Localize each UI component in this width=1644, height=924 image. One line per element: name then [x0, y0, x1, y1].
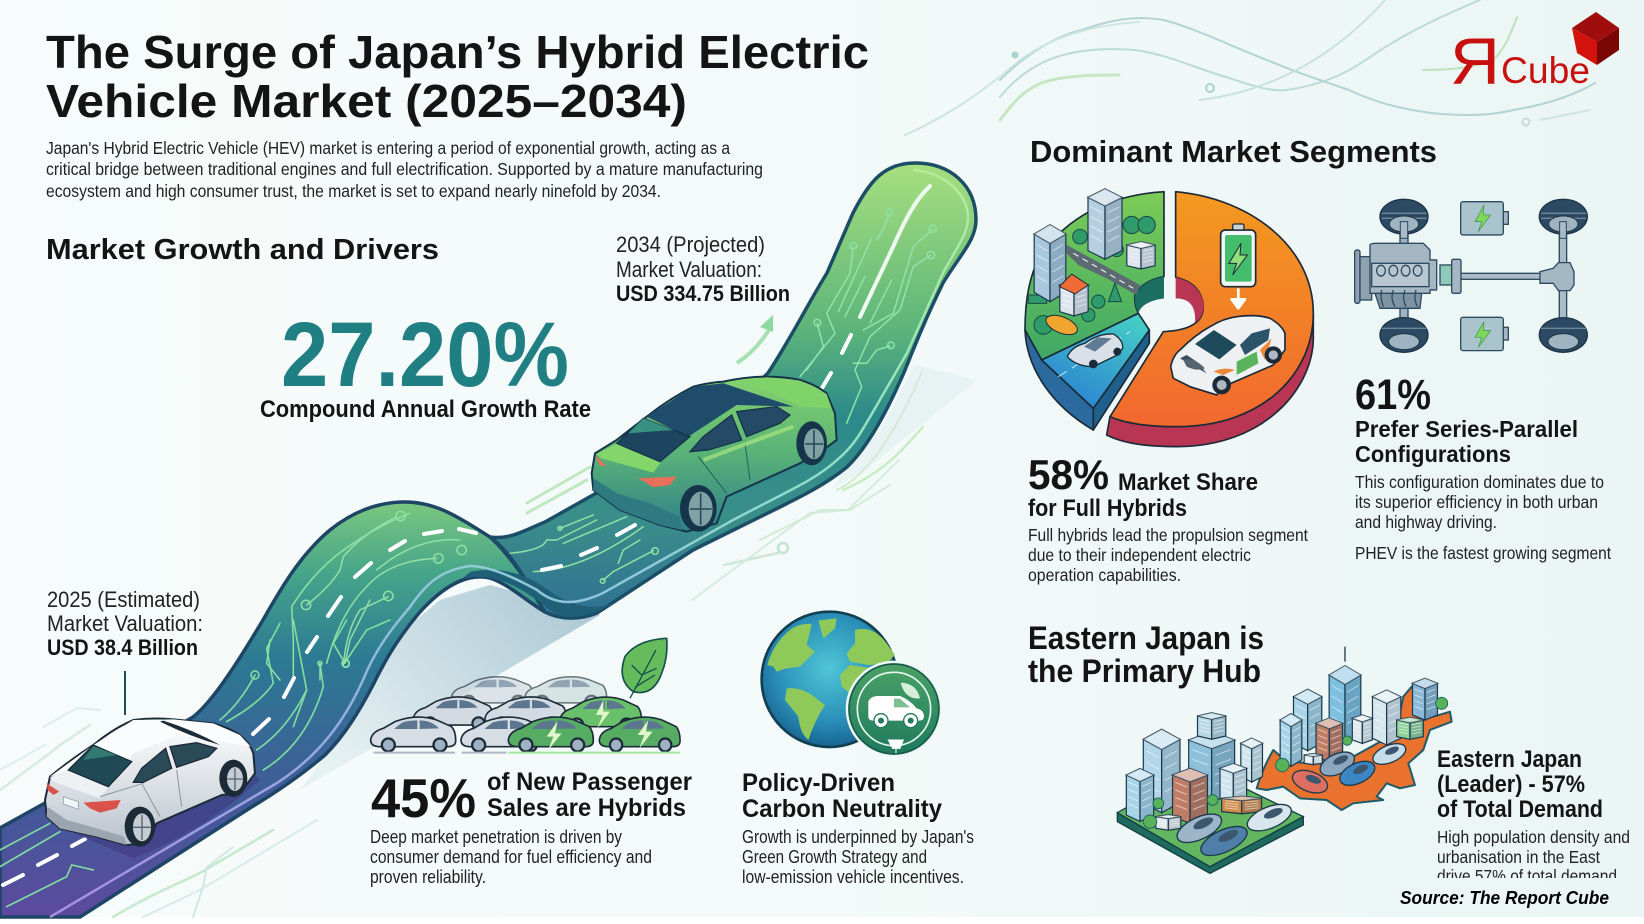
stat: 45 percent of new passenger sales: of New Passenger — [487, 768, 692, 796]
intro paragraph — [46, 138, 763, 201]
logo: RCube: Я — [1450, 24, 1500, 98]
middle row cars — [413, 697, 642, 733]
stat: 58 percent full hybrids: 58% — [1028, 451, 1109, 498]
road: lower section, valley to hill crest — [0, 502, 545, 917]
green car 2034 — [592, 377, 837, 532]
callout: 2025 estimated valuation: USD 38.4 Billion — [47, 635, 198, 660]
map car windows — [1192, 745, 1400, 844]
green segment — [1025, 192, 1164, 360]
back row cars — [452, 677, 607, 708]
orange Japan shape — [1257, 687, 1452, 810]
small orange car — [1043, 311, 1080, 339]
text block: policy-driven carbon neutrality: Growth is underpinned by Japan's — [742, 827, 974, 847]
green base side — [1117, 813, 1303, 873]
stat: 45 percent of new passenger sales: proven reliability. — [370, 867, 486, 887]
text block: eastern japan leader — [1437, 746, 1630, 886]
trunk deck — [597, 443, 661, 473]
axle stubs over wheels — [1400, 222, 1566, 238]
tail lights — [83, 800, 121, 813]
stat: 45 percent of new passenger sales: Sales are Hybrids — [487, 794, 686, 822]
stat: 45 percent of new passenger sales: consumer demand for fuel efficiency and — [370, 847, 652, 867]
road cast shadow — [300, 365, 977, 790]
road: circuit traces hill and right section — [267, 511, 658, 680]
text block: eastern japan leader: of Total Demand — [1437, 796, 1603, 823]
stat: 61 percent series-parallel — [1355, 371, 1611, 563]
leaf — [901, 683, 920, 698]
drivetrain diagram — [1355, 199, 1587, 352]
icon: fleet of cars with leaf — [371, 638, 680, 753]
heading: eastern japan is the primary hub: Eastern Japan is — [1028, 620, 1264, 656]
engine — [1355, 243, 1461, 308]
stat: 61 percent series-parallel: and highway driving. — [1355, 512, 1497, 532]
stat: 61 percent series-parallel: PHEV is the fastest growing segment — [1355, 543, 1611, 563]
callout: 2034 projected valuation: USD 334.75 Billion — [616, 281, 790, 306]
wheels — [125, 807, 155, 847]
stat: 45 percent of new passenger sales: Deep market penetration is driven by — [370, 827, 622, 847]
front row cars — [371, 717, 680, 753]
title: The Surge of Japan’s Hybrid Electric — [46, 26, 869, 78]
stat: 45 percent of new passenger sales: 45% — [371, 767, 476, 829]
text block: policy-driven carbon neutrality — [742, 769, 974, 887]
background decorative nodes — [1012, 52, 1530, 126]
white car 2025 — [45, 718, 260, 858]
orange segment depth — [1107, 313, 1313, 447]
tail lights — [638, 477, 677, 487]
callout: 2034 projected valuation: 2034 (Projected) — [616, 232, 765, 257]
bonnet — [740, 377, 832, 408]
down arrow — [1232, 288, 1245, 308]
road: glowing edge line — [50, 170, 968, 917]
stat: 61 percent series-parallel: Prefer Series-Parallel — [1355, 416, 1578, 442]
stat: CAGR: 27.20% — [281, 304, 569, 406]
stat: 61 percent series-parallel: Configurations — [1355, 441, 1511, 467]
callout: 2025 estimated valuation: Market Valuation: — [47, 611, 203, 636]
growth road — [0, 163, 976, 917]
blue segment — [1042, 313, 1149, 408]
text block: eastern japan leader: urbanisation in the East — [1437, 847, 1600, 867]
right city buildings — [1280, 647, 1437, 766]
intro paragraph: critical bridge between traditional engines and full electrification. Supported by a mature manufacturing — [46, 159, 763, 179]
background circuit lines around the road — [0, 372, 923, 917]
background circuit lines, top right — [905, 0, 1595, 135]
heading: eastern japan is the primary hub — [1028, 620, 1264, 689]
wheels — [1380, 199, 1587, 352]
road: dark underside fold — [463, 570, 612, 617]
callout: 2025 estimated valuation — [47, 587, 203, 660]
intro paragraph: Japan's Hybrid Electric Vehicle (HEV) market is entering a period of exponential growth, acting as a — [46, 138, 730, 158]
heading: eastern japan is the primary hub: the Primary Hub — [1028, 653, 1261, 689]
side windows — [690, 415, 742, 452]
road: lane dashes — [3, 335, 851, 885]
isometric map of Eastern Japan — [1117, 647, 1452, 873]
car body — [592, 377, 837, 532]
windows — [68, 745, 132, 787]
stat: 45 percent of new passenger sales — [370, 767, 692, 887]
text block: policy-driven carbon neutrality: Policy-Driven — [742, 769, 895, 797]
road: upper section climbing to 2034 — [490, 163, 976, 618]
stat: 58 percent full hybrids: operation capabilities. — [1028, 565, 1181, 585]
stat: 58 percent full hybrids: due to their independent electric — [1028, 545, 1251, 565]
blue segment car — [1067, 334, 1123, 368]
title: Vehicle Market (2025–2034) — [46, 75, 687, 127]
ground lines — [373, 750, 507, 756]
stat: 61 percent series-parallel: its superior efficiency in both urban — [1355, 492, 1598, 512]
heading: dominant market segments: Dominant Market Segments — [1030, 134, 1437, 169]
van — [868, 696, 924, 721]
callout: 2034 projected valuation — [616, 232, 790, 306]
text block: eastern japan leader: Eastern Japan — [1437, 746, 1582, 773]
trunk and bumper — [50, 770, 108, 798]
continents — [767, 618, 895, 740]
globe — [762, 612, 897, 747]
wheels — [680, 485, 717, 532]
road on green segment — [1067, 245, 1140, 295]
orange segment — [1110, 192, 1313, 427]
batteries — [1461, 202, 1508, 351]
trees — [1143, 697, 1448, 828]
title — [46, 26, 869, 127]
logo: RCube: Cube — [1501, 50, 1590, 91]
stat: CAGR: Compound Annual Growth Rate — [260, 396, 591, 423]
intro paragraph: ecosystem and high consumer trust, the market is set to expand nearly ninefold by 2034. — [46, 181, 661, 201]
road: circuit traces top — [800, 209, 936, 423]
leaf — [622, 638, 667, 693]
text block: eastern japan leader: (Leader) - 57% — [1437, 771, 1585, 798]
road: circuit traces lower — [0, 620, 390, 907]
plug — [888, 740, 903, 753]
battery icon — [1221, 230, 1256, 287]
bumper — [593, 478, 682, 530]
stat: 61 percent series-parallel: 61% — [1355, 371, 1431, 419]
axles and shaft — [1400, 227, 1567, 322]
growth arrow — [737, 315, 773, 363]
road: long white centre line — [860, 186, 930, 317]
electric bolts — [547, 700, 653, 750]
stat: 61 percent series-parallel: This configuration dominates due to — [1355, 472, 1604, 492]
stat: 58 percent full hybrids: Full hybrids lead the propulsion segment — [1028, 525, 1308, 545]
heading: market growth and drivers: Market Growth and Drivers — [46, 234, 439, 266]
icon: globe with eco vehicle badge — [762, 612, 942, 757]
text block: policy-driven carbon neutrality: low-emission vehicle incentives. — [742, 867, 964, 887]
text block: eastern japan leader: drive 57% of total demand — [1437, 866, 1617, 886]
car body — [45, 718, 255, 845]
map cars — [1173, 739, 1409, 862]
towers — [1034, 189, 1155, 316]
green base top — [1117, 767, 1303, 867]
car shadow — [50, 753, 260, 858]
blue segment depth — [1025, 330, 1093, 430]
source credit: Source: The Report Cube — [1400, 888, 1609, 908]
connector line to 2025 label — [124, 671, 126, 715]
callout: 2025 estimated valuation: 2025 (Estimated) — [47, 587, 200, 612]
hybrid car — [1171, 316, 1285, 395]
stat: 58 percent full hybrids — [1028, 451, 1308, 585]
roof glass — [647, 383, 793, 437]
badge ring — [846, 661, 942, 757]
text block: policy-driven carbon neutrality: Carbon Neutrality — [742, 795, 942, 823]
text block: policy-driven carbon neutrality: Green Growth Strategy and — [742, 847, 927, 867]
pie chart: market share illustration — [1025, 189, 1313, 447]
callout: 2034 projected valuation: Market Valuation: — [616, 257, 762, 282]
stat: 58 percent full hybrids: for Full Hybrids — [1028, 495, 1187, 522]
speed lines behind green car — [527, 467, 590, 513]
forest — [1028, 216, 1155, 334]
logo: RCube — [1450, 12, 1619, 98]
house roof — [1059, 274, 1088, 294]
differential — [1540, 263, 1574, 291]
stat: 58 percent full hybrids: Market Share — [1118, 469, 1258, 496]
left city buildings — [1126, 713, 1262, 830]
